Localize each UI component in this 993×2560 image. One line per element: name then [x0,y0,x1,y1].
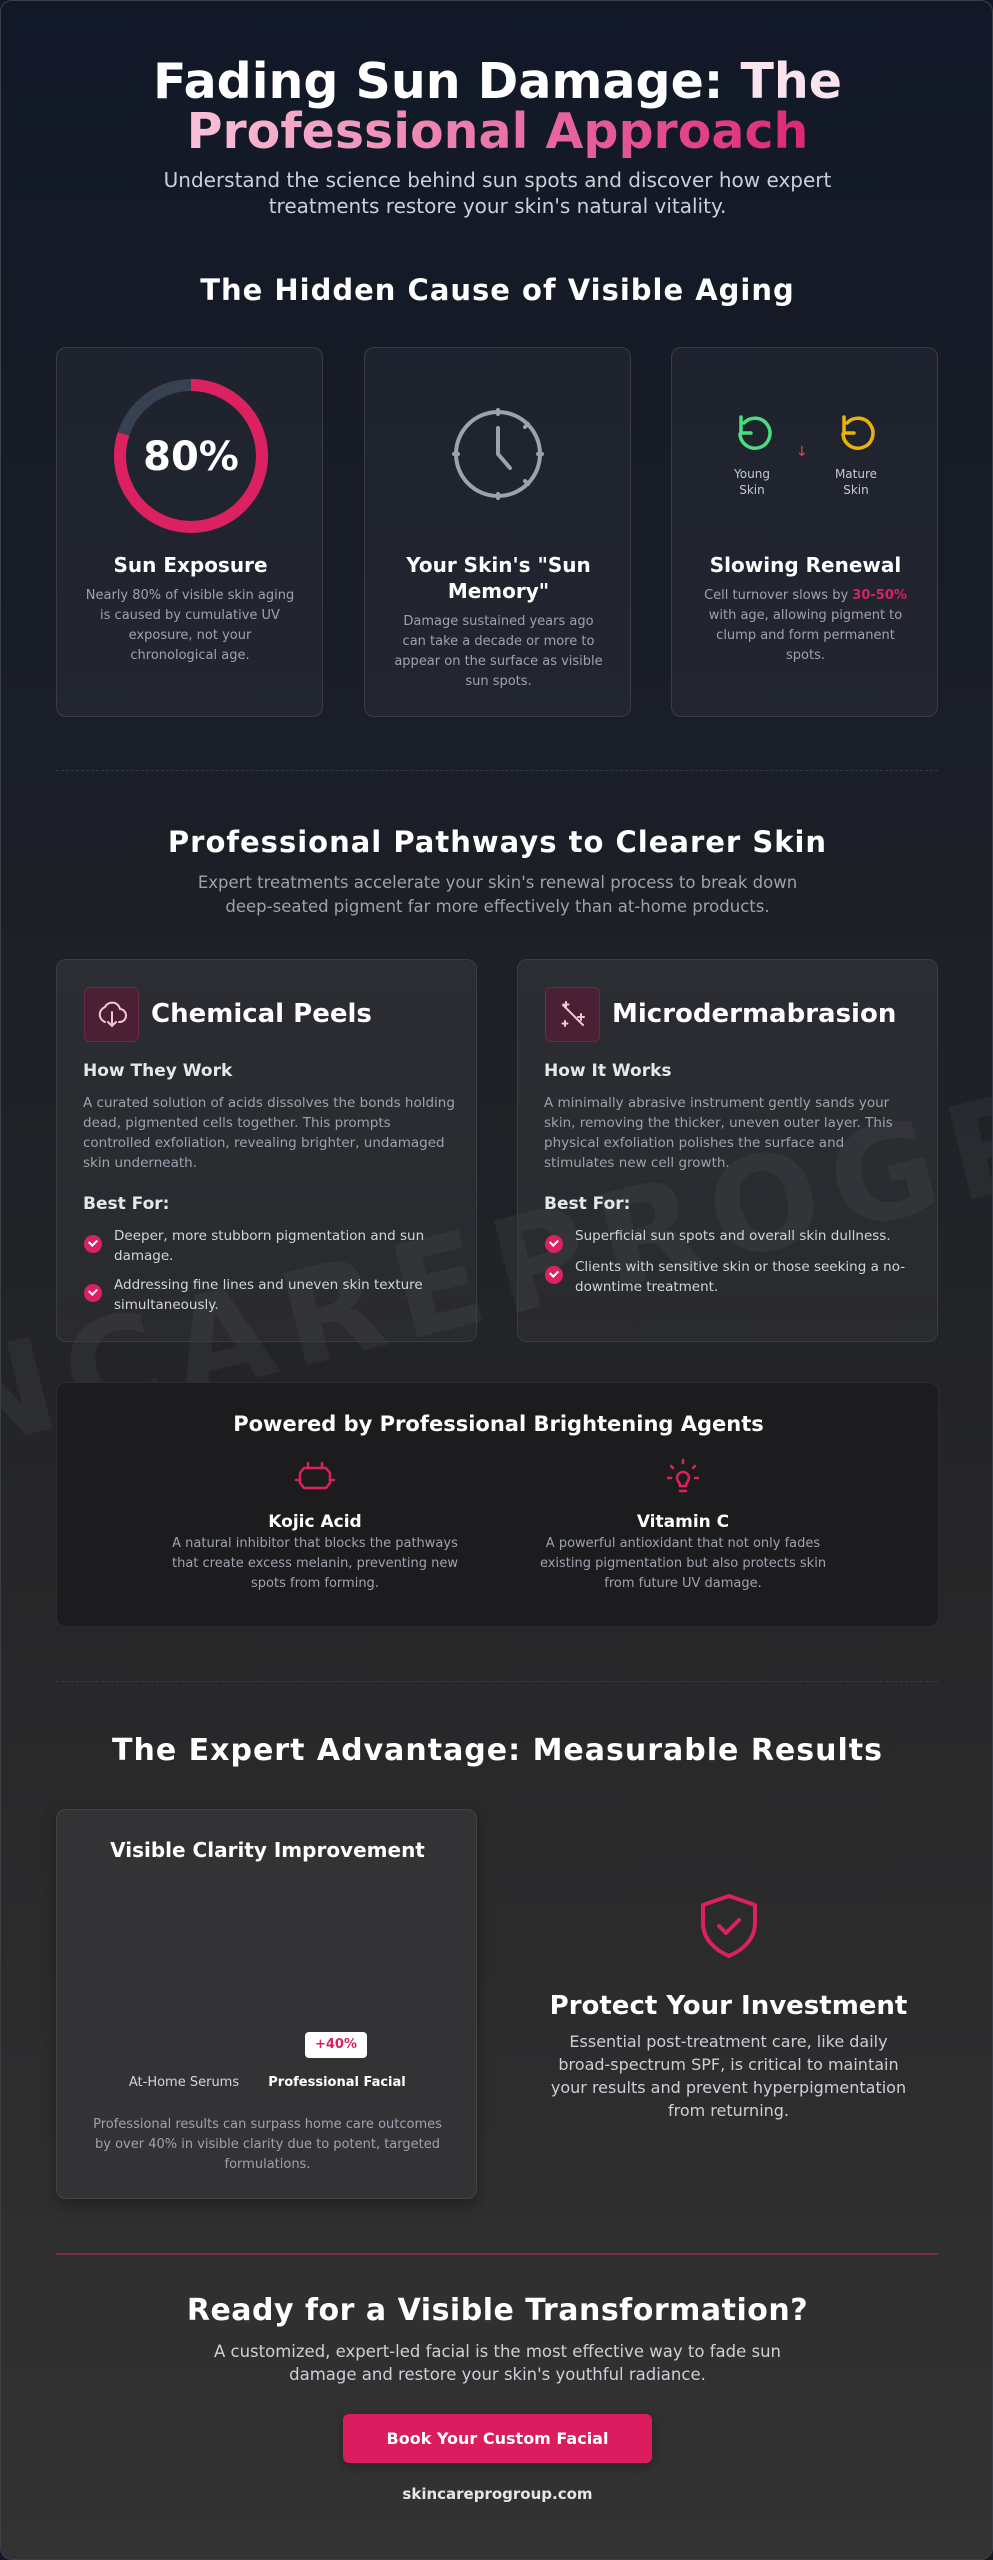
text: Damage sustained years ago can take a decade or more to appear on the surface as visible sun spots. [394,614,603,689]
button [343,2414,652,2463]
title: Chemical Peels [151,999,372,1029]
icon: shield [701,1894,757,1958]
subtitle: Expert treatments accelerate your skin's renewal process to break down [198,873,797,892]
footer url: skincareprogroup.com [402,2485,593,2503]
panel: chemical peels: Addressing fine lines and uneven skin texture simultaneously. [114,1277,423,1313]
heading: Powered by Professional Brightening Agents [233,1412,764,1436]
panel: brightening agents [56,1382,939,1627]
heading: Sun Exposure [113,553,268,577]
card: slowing renewal: Mature [835,467,877,481]
subtitle: Understand the science behind sun spots and discover how expert [164,168,831,192]
agent: vitamin c: Vitamin C [637,1512,729,1532]
title [153,53,842,160]
agent: vitamin c [540,1458,826,1591]
card: sun exposure [56,347,323,717]
panel: microdermabrasion: Superficial sun spots and overall skin dullness. [575,1228,891,1244]
title: Professional Approach [187,103,808,160]
panel: microdermabrasion: Clients with sensitive skin or those seeking a no-downtime treatment. [575,1259,905,1295]
icon: kojic [294,1462,336,1490]
labels [734,467,770,497]
text: Cell turnover slows by 30-50% with age, allowing pigment to clump and form permanent spots. [704,588,907,663]
heading: Slowing Renewal [710,553,901,577]
donut chart [114,379,268,533]
title: Microdermabrasion [612,999,896,1029]
icon: clock [452,408,544,500]
heading: expert advantage: The Expert Advantage: Measurable Results [112,1733,883,1768]
panel: chemical peels: A curated solution of acids dissolves the bonds holding dead, pigmented cells together. This prompts controlled exfoliation, revealing brighter, undamaged skin underneath. [83,1095,455,1171]
panel: chemical peels [56,959,477,1342]
button: Book Your Custom Facial [387,2429,608,2448]
agent: vitamin c: A powerful antioxidant that not only fades existing pigmentation but also protects skin from future UV damage. [540,1536,826,1591]
panel: chart [56,1809,477,2199]
panel: microdermabrasion: How It Works [544,1061,672,1081]
heading: pathways: Professional Pathways to Clearer Skin [168,825,827,859]
heading: Your Skin's "Sun [406,553,591,577]
chart title: Visible Clarity Improvement [110,1838,425,1862]
subtitle [198,873,797,916]
panel: chemical peels: Deeper, more stubborn pigmentation and sun damage. [114,1228,424,1264]
panel: microdermabrasion: A minimally abrasive instrument gently sands your skin, removing the thicker, uneven outer layer. This physical exfoliation polishes the surface and stimulates new cell growth. [544,1095,893,1171]
icon: young skin cycle [738,415,772,450]
cta text: damage and restore your skin's youthful radiance. [289,2365,706,2384]
panel: microdermabrasion [517,959,938,1342]
icon: mature skin cycle [841,415,875,450]
icon: bulb [666,1458,700,1492]
heading: Memory" [448,579,549,603]
donut chart: 80% [143,434,239,480]
card: slowing renewal: Skin [843,483,869,497]
panel: chart: Professional Facial [268,2075,406,2090]
subtitle [164,168,831,218]
heading: cta: Ready for a Visible Transformation? [187,2293,808,2328]
heading [406,553,591,603]
subtitle: deep-seated pigment far more effectively than at-home products. [225,897,770,916]
labels: Young [734,467,770,481]
caption: Professional results can surpass home care outcomes by over 40% in visible clarity due to potent, targeted formulations. [93,2117,442,2172]
how it works: How They Work [83,1061,232,1081]
icon: cloud [84,987,139,1042]
labels: Skin [739,483,765,497]
title: Fading Sun Damage: The [153,53,842,110]
badge: +40% [315,2037,357,2052]
arrow: ↓ [796,444,808,460]
best for: Best For: [83,1194,169,1214]
callout: protect: Protect Your Investment [550,1991,907,2021]
card: sun memory [364,347,631,717]
agent: kojic: Kojic Acid [268,1512,362,1532]
icon: sparkles [545,987,600,1042]
agent: kojic [172,1462,458,1591]
badge [305,2032,367,2058]
cta text [214,2342,781,2384]
agent: kojic: A natural inhibitor that blocks the pathways that create excess melanin, preventing new spots from forming. [172,1536,458,1591]
callout: protect: Essential post-treatment care, like daily broad-spectrum SPF, is critical to maintain your results and prevent hyperpigmentation from returning. [551,2032,906,2120]
text: Nearly 80% of visible skin aging is caused by cumulative UV exposure, not your chronological age. [86,588,294,663]
cta text: A customized, expert-led facial is the most effective way to fade sun [214,2342,781,2361]
heading: hidden cause: The Hidden Cause of Visible Aging [200,273,795,307]
callout: protect [550,1894,907,2120]
subtitle: treatments restore your skin's natural vitality. [269,194,726,218]
panel: microdermabrasion: Best For: [544,1194,630,1214]
labels: At-Home Serums [129,2075,239,2090]
card: slowing renewal [671,347,938,717]
